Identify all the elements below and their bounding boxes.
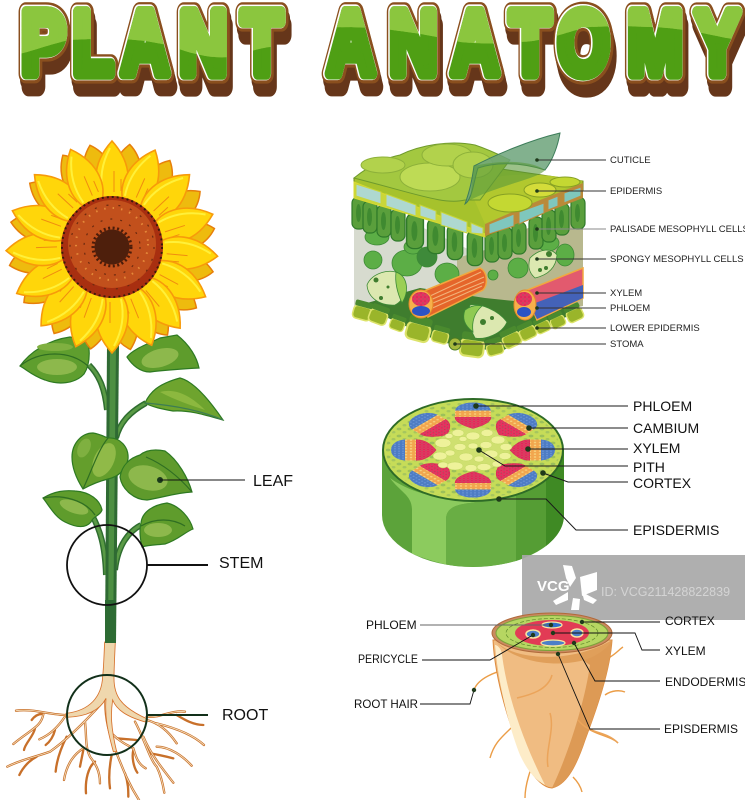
- stem circle callout: STEM: [219, 555, 263, 572]
- vascular bundles: [391, 402, 555, 498]
- stem cross-section diagram: CORTEX: [633, 475, 692, 491]
- leaf cross-section diagram: STOMA: [610, 339, 644, 350]
- cylinder top: [382, 398, 564, 502]
- pith cells: [433, 430, 512, 472]
- root cross-section diagram: CORTEX: [665, 614, 715, 628]
- spongy cells: [364, 229, 574, 338]
- stem circle callout: [67, 525, 263, 605]
- title: [21, 0, 742, 106]
- stem section labels: [476, 406, 628, 530]
- leaves: [20, 335, 223, 547]
- title: ANATOMY: [329, 0, 741, 100]
- root body: [493, 640, 612, 788]
- root top section: [492, 613, 612, 653]
- leaf: middle right: [120, 450, 192, 500]
- watermark: ID: VCG211428822839: [601, 585, 730, 599]
- leaf cross-section diagram: CUTICLE: [610, 155, 651, 166]
- leaf: lower left: [43, 491, 102, 527]
- leaf: lower right: [140, 503, 193, 547]
- interior background: [354, 195, 583, 330]
- stem cross-section diagram: XYLEM: [633, 440, 680, 456]
- leaf cross-section diagram: PALISADE MESOPHYLL CELLS: [610, 224, 745, 235]
- root cross-section diagram: ENDODERMIS: [665, 675, 745, 689]
- title: ANATOMY: [330, 6, 742, 106]
- root cross-section diagram: XYLEM: [665, 644, 706, 658]
- root circle callout: ROOT: [222, 707, 268, 724]
- palisade cells: [352, 197, 585, 266]
- sunflower: [6, 141, 219, 353]
- surface hairs: [517, 675, 618, 767]
- stem cross-section diagram: EPISDERMIS: [633, 522, 719, 538]
- stem cross-section diagram: CAMBIUM: [633, 420, 699, 436]
- stem cross-section diagram: PITH: [633, 459, 665, 475]
- leaf: upper left: [20, 337, 89, 383]
- root section labels: [420, 622, 660, 729]
- leaf section labels: [455, 160, 606, 344]
- leaf cross-section diagram: [352, 133, 745, 358]
- root hairs: [474, 647, 625, 798]
- watermark: VCG: [537, 578, 570, 595]
- vascular tube red and blue: [514, 268, 583, 320]
- leaf cross-section diagram: XYLEM: [610, 288, 642, 299]
- leaf cross-section diagram: SPONGY MESOPHYLL CELLS: [610, 254, 744, 265]
- stem cross-section diagram: PHLOEM: [633, 398, 692, 414]
- leaf: middle left: [72, 433, 128, 489]
- title: PLANT: [23, 0, 284, 100]
- xylem tube orange: [409, 268, 486, 318]
- lower epidermis cells: [352, 288, 585, 358]
- roots: [7, 642, 204, 800]
- leaf cross-section diagram: EPIDERMIS: [610, 186, 662, 197]
- root circle callout: [67, 675, 268, 755]
- leaf cross-section diagram: LOWER EPIDERMIS: [610, 323, 700, 334]
- root cross-section diagram: PERICYCLE: [358, 652, 418, 666]
- back petals: [7, 142, 217, 352]
- stem: [89, 345, 146, 643]
- root cross-section diagram: ROOT HAIR: [354, 697, 418, 711]
- leaf callout: [157, 473, 293, 490]
- stem cross-section diagram: [382, 398, 719, 567]
- leaf: right branch: [145, 378, 223, 420]
- watermark: [522, 555, 745, 620]
- watermark logo: [553, 565, 597, 610]
- leaf: upper right: [127, 335, 199, 372]
- root cross-section diagram: PHLOEM: [366, 618, 417, 632]
- root cross-section diagram: EPISDERMIS: [664, 722, 738, 736]
- front petals: [6, 141, 219, 353]
- title: PLANT: [24, 6, 285, 106]
- leaf cross-section diagram: PHLOEM: [610, 303, 650, 314]
- upper epidermis: [354, 160, 583, 237]
- cuticle top layer: [354, 133, 560, 204]
- flower disk: [61, 196, 163, 298]
- leaf callout: LEAF: [253, 473, 293, 490]
- root cross-section diagram: [354, 613, 745, 798]
- cylinder body: [382, 450, 564, 567]
